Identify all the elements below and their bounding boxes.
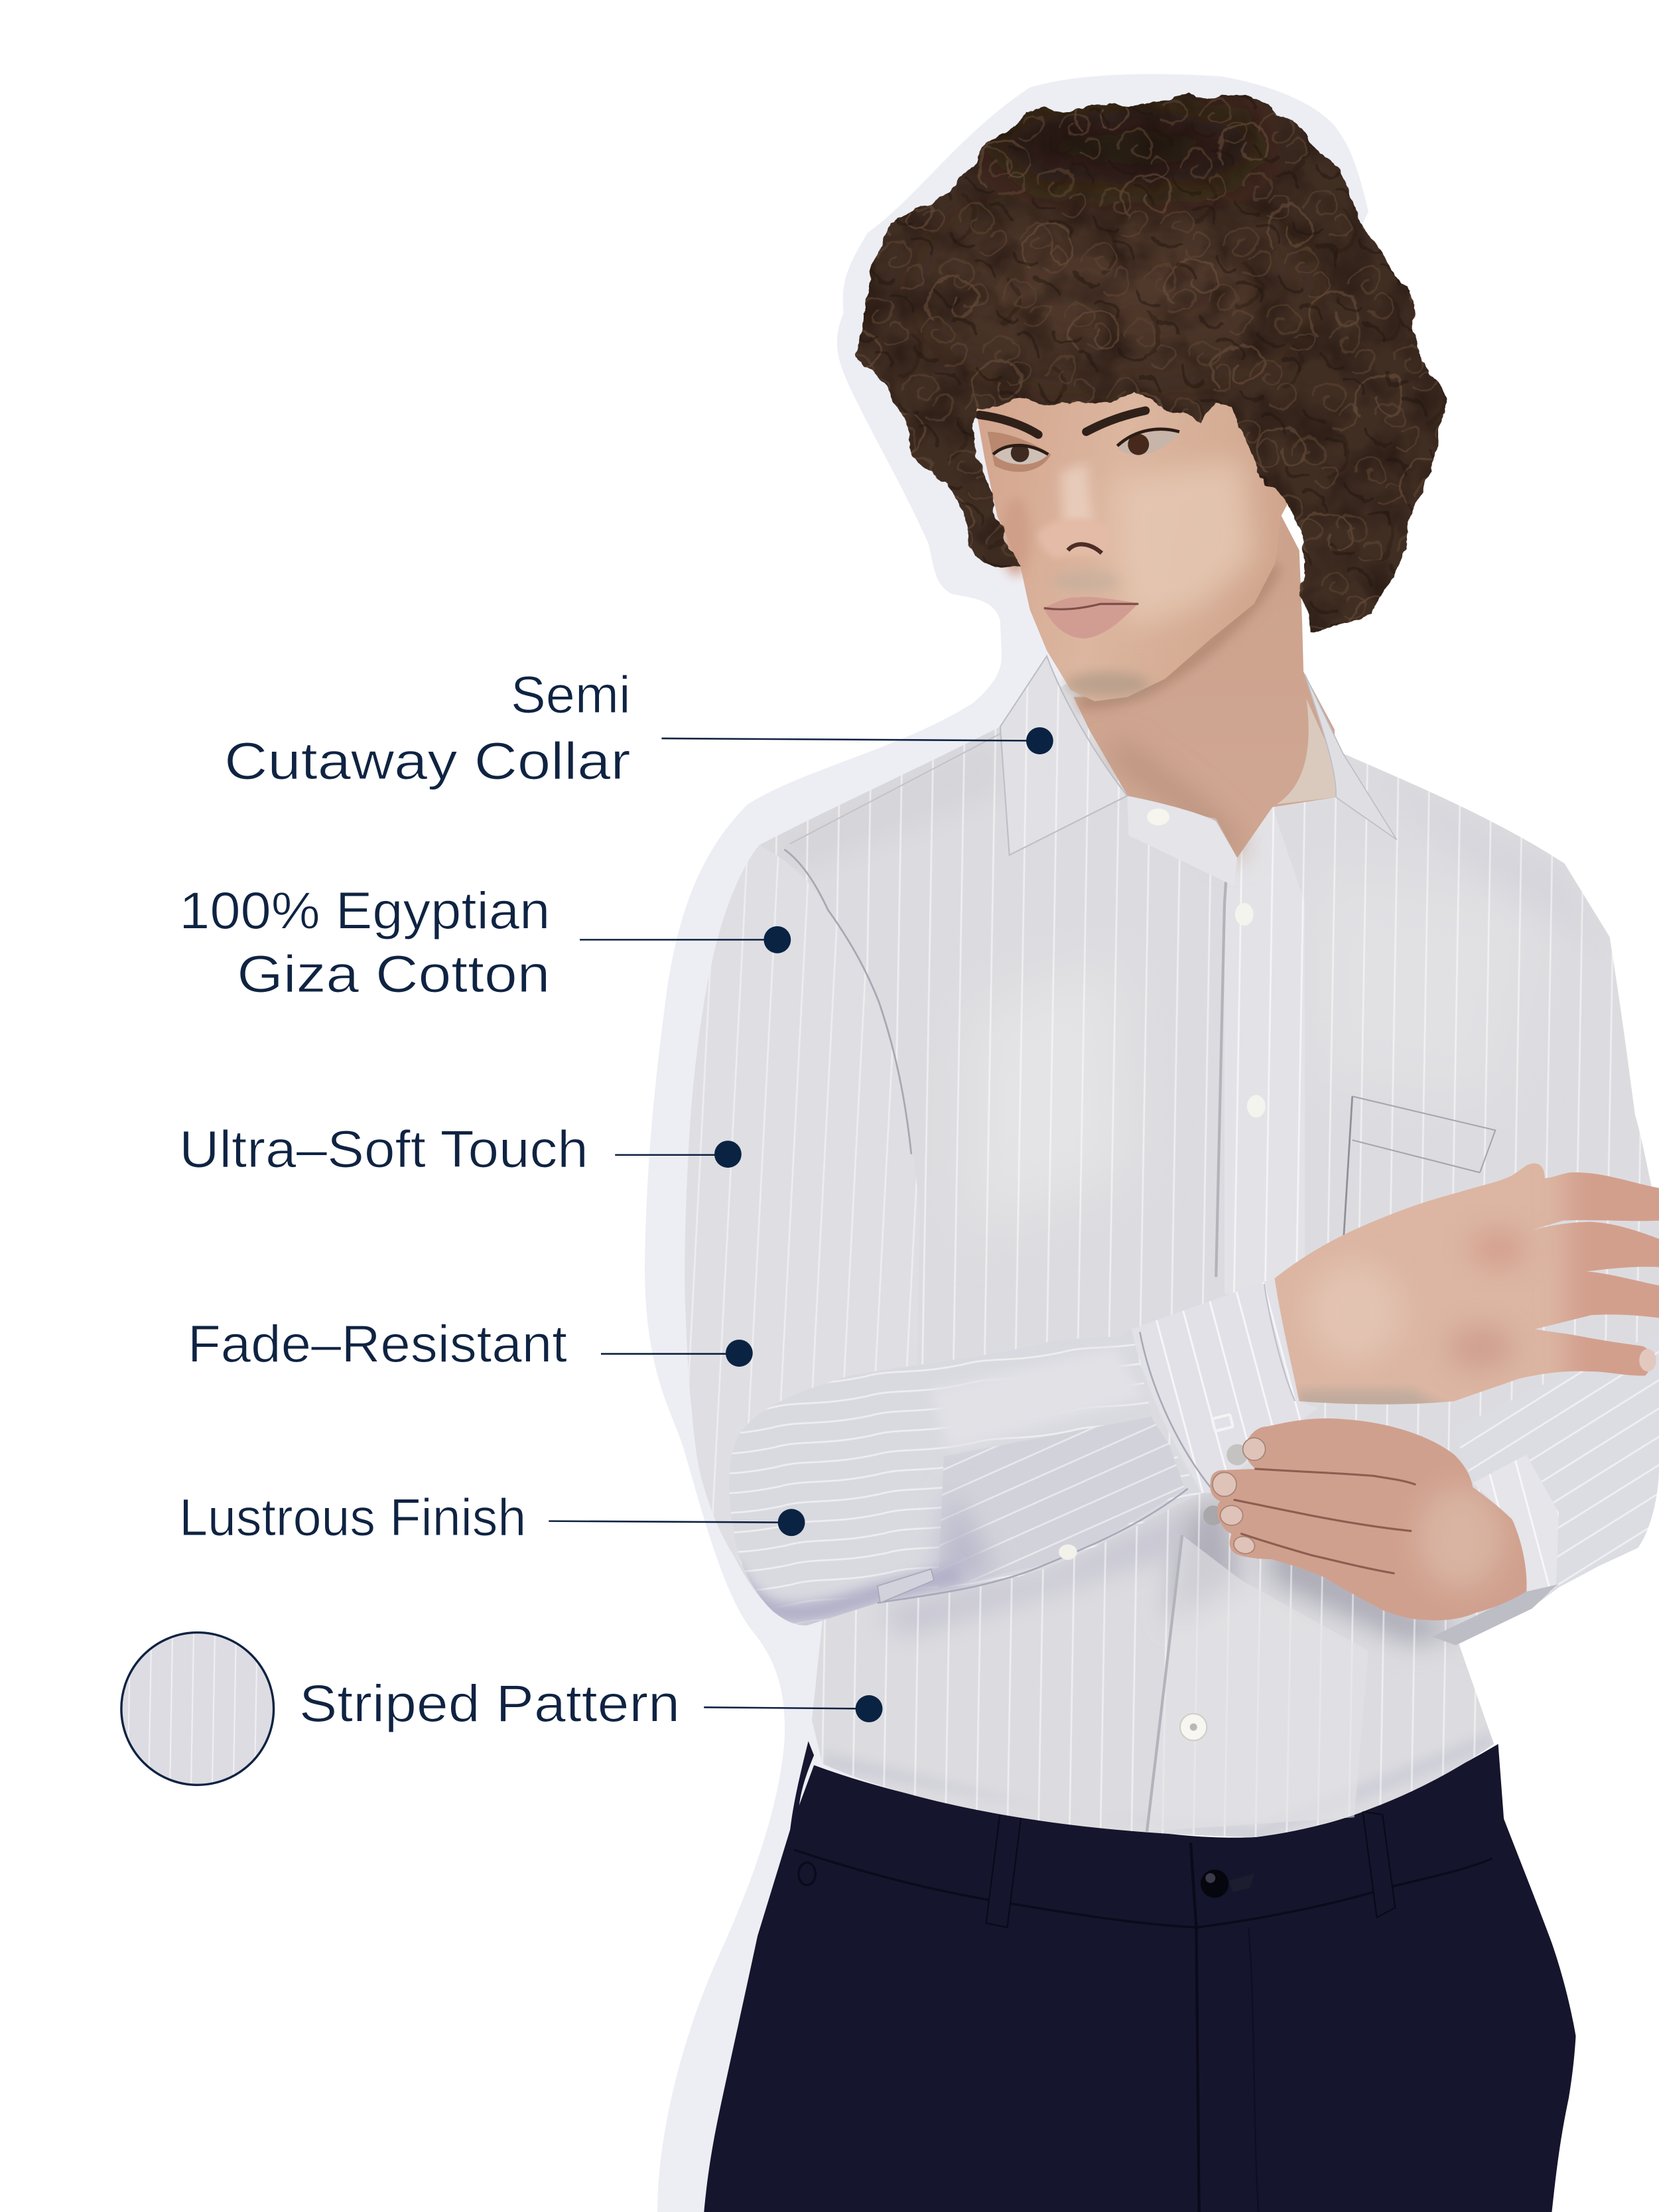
callout: Striped Pattern [121, 1633, 882, 1785]
placket [1147, 807, 1368, 1831]
label: Ultra–Soft Touch [179, 1120, 588, 1178]
left collar leaf [1000, 656, 1127, 855]
right collar leaf [1305, 675, 1396, 839]
label: Striped Pattern [299, 1675, 680, 1733]
left forearm [726, 1329, 1202, 1625]
hair [832, 70, 1467, 649]
leader line [601, 1353, 739, 1355]
label: Fade–Resistant [188, 1314, 567, 1373]
marker dot [763, 926, 791, 953]
label [179, 881, 550, 1003]
right cuff [1432, 1455, 1559, 1645]
collar lining [1277, 699, 1336, 804]
label: Giza Cotton [237, 945, 550, 1003]
leader line [615, 1154, 728, 1156]
shirt body [685, 677, 1659, 1837]
label: 100% Egyptian [179, 881, 550, 939]
marker dot [856, 1695, 882, 1722]
fabric swatch [121, 1633, 274, 1785]
left sleeve [685, 845, 920, 1608]
silhouette halo behind model [645, 74, 1368, 2212]
marker dot [714, 1141, 742, 1168]
shirt [677, 677, 1659, 1848]
right sleeve lower [1453, 1334, 1659, 1588]
brows [979, 411, 1146, 435]
lips [1044, 597, 1138, 638]
trousers [704, 1741, 1576, 2212]
left cuff [1132, 1279, 1317, 1493]
marker dot [726, 1340, 753, 1367]
label: Lustrous Finish [179, 1488, 526, 1547]
callout: 100% Egyptian Giza Cotton [179, 881, 791, 1003]
leader line [661, 738, 1039, 741]
leader line [704, 1707, 869, 1708]
marker dot [1026, 727, 1053, 754]
label [224, 665, 631, 790]
callout: Ultra-Soft Touch [179, 1120, 742, 1178]
collar [1000, 656, 1396, 886]
label: Semi [511, 665, 631, 724]
label: Cutaway Collar [224, 732, 631, 790]
shirt shading [759, 726, 1608, 1841]
callout: Semi Cutaway Collar [224, 665, 1053, 790]
collar inner band [1127, 795, 1237, 886]
shirt stripes [762, 727, 1641, 1837]
buttons [1059, 903, 1266, 1740]
neck [1073, 515, 1336, 858]
nose [1037, 518, 1112, 559]
callout: Lustrous Finish [179, 1488, 805, 1547]
hands [1210, 1115, 1659, 1620]
pocket [1343, 1096, 1495, 1249]
marker dot [778, 1509, 805, 1536]
callout: Fade-Resistant [188, 1314, 753, 1373]
model photo [677, 70, 1659, 2212]
face [973, 367, 1292, 701]
leader line [549, 1521, 791, 1523]
eyes [988, 429, 1179, 472]
head [832, 70, 1467, 701]
collar button [1147, 809, 1169, 825]
lower hand [1210, 1418, 1526, 1620]
ear [1290, 488, 1329, 506]
leader line [580, 939, 777, 940]
upper hand [1275, 1163, 1659, 1405]
